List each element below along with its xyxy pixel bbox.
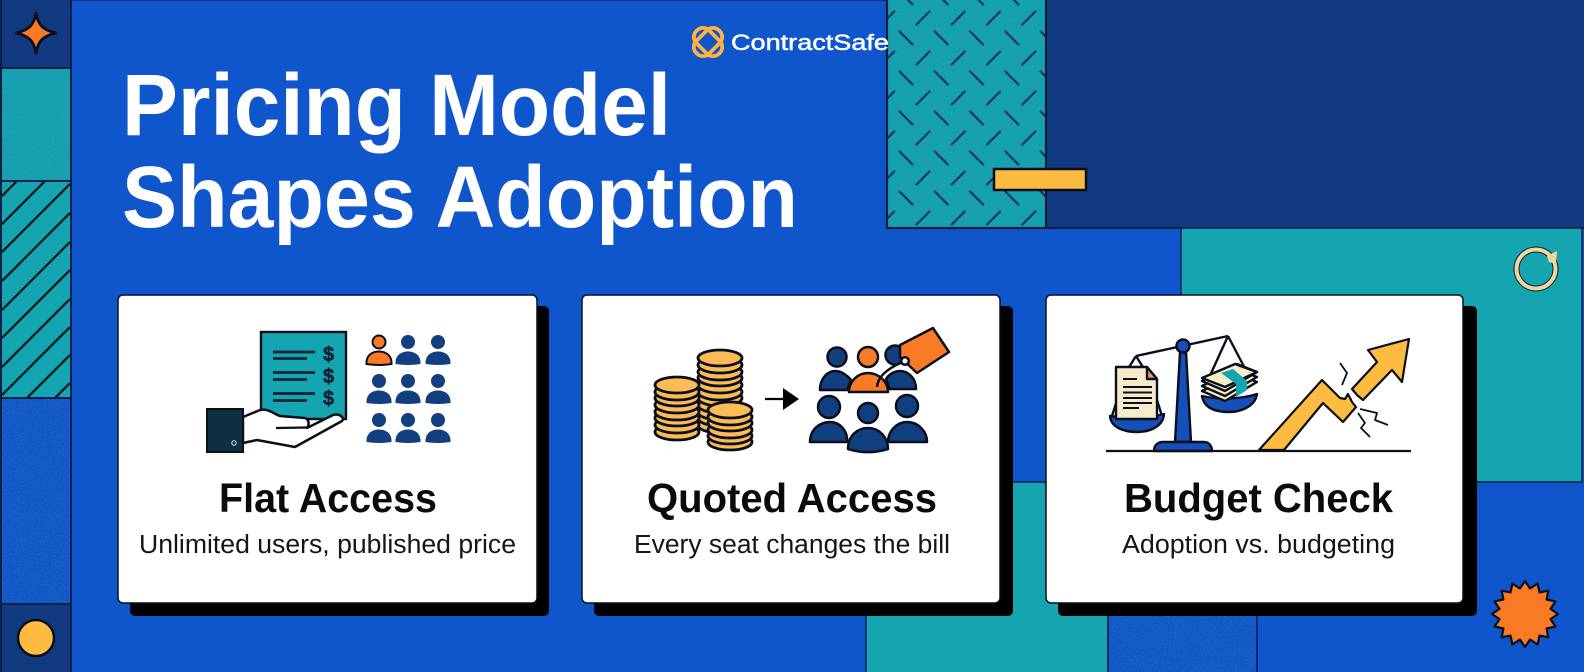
panel: teal block bottom (866, 482, 1108, 672)
ground line (1106, 450, 1411, 452)
icon: yellow bar (994, 169, 1086, 190)
icon: invoice on open hand: $ (323, 388, 334, 410)
icon: broken growth arrow (1259, 339, 1409, 450)
icon: logo mark (690, 24, 726, 60)
logo wordmark: ContractSafe (731, 30, 889, 55)
panel: Quoted Access card (582, 295, 1013, 616)
panel: textured blue block bottom (1108, 600, 1257, 672)
icon: yellow circle (18, 620, 54, 656)
panel: Budget Check card (1046, 295, 1477, 616)
icon: grid of users (366, 335, 451, 443)
icon: invoice on open hand: $ (323, 344, 334, 366)
card text: Unlimited users, published price (139, 531, 516, 559)
icon: orange star (16, 13, 56, 53)
card heading: Quoted Access (647, 475, 937, 521)
icon: seats with price tag (810, 328, 949, 452)
panel: Flat Access card (118, 295, 549, 616)
card text: Adoption vs. budgeting (1122, 531, 1395, 559)
title: Shapes Adoption (122, 149, 798, 246)
arrow: coins to seats (765, 388, 799, 410)
icon: circular arrow ring (1516, 250, 1557, 288)
icon: balance scale (1110, 336, 1257, 451)
icon: orange burst (1492, 581, 1558, 647)
icon: invoice on open hand (207, 332, 346, 452)
title (122, 57, 798, 246)
panel: teal block right (1181, 228, 1582, 482)
title: Pricing Model (122, 57, 671, 154)
panel: top edge line (72, 0, 887, 1)
panel: navy block top right (1046, 0, 1584, 228)
panel: left decorative strip (1, 0, 71, 672)
panel: teal diamond plate block (887, 0, 1046, 228)
card heading: Flat Access (219, 475, 437, 521)
logo: ContractSafe (690, 24, 889, 60)
icon: coin stacks (655, 350, 752, 450)
card text: Every seat changes the bill (634, 531, 950, 559)
card heading: Budget Check (1124, 475, 1393, 521)
icon: invoice on open hand: $ (323, 366, 334, 388)
